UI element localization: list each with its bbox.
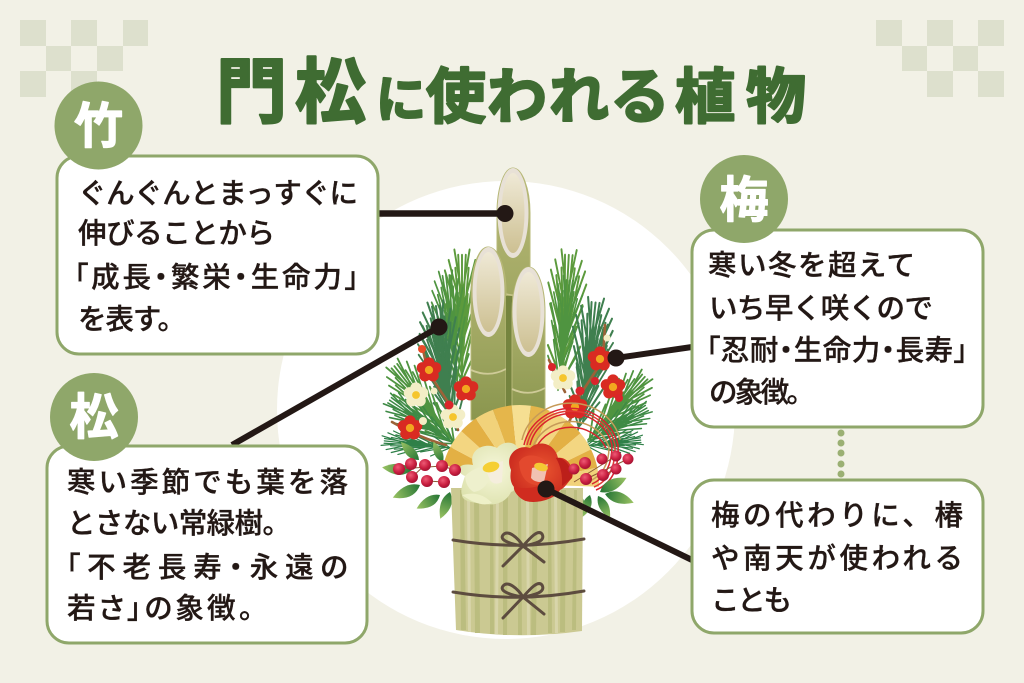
panel: camellia and nandina note	[692, 480, 983, 633]
leader line: pine	[232, 318, 448, 445]
plum blossoms	[398, 334, 625, 439]
title	[216, 54, 806, 133]
red and gold cord rings	[522, 403, 620, 490]
rope ties	[453, 533, 584, 618]
plum branches	[392, 325, 605, 445]
nandina berries	[393, 450, 634, 488]
leaves	[382, 439, 635, 521]
bamboo text: 伸びることから	[78, 218, 275, 250]
leader line: plum	[608, 347, 692, 366]
bamboo callout box	[57, 156, 378, 354]
pine branches	[378, 249, 661, 460]
pine text: 若さ」の象徴。	[67, 593, 253, 625]
bamboo text: を表す。	[78, 304, 186, 336]
plum text	[706, 250, 968, 409]
bamboo text: ぐんぐんとまっすぐに	[78, 178, 358, 210]
bamboo text	[74, 178, 359, 336]
pine text	[66, 467, 348, 625]
white camellia	[459, 443, 524, 504]
straw basket	[451, 488, 584, 635]
title: 門松	[216, 54, 366, 133]
left bamboo	[471, 247, 506, 420]
bamboo stalks	[471, 168, 545, 420]
leader line: bamboo	[378, 205, 514, 222]
pine callout box	[47, 446, 367, 643]
plum badge	[700, 155, 788, 243]
plum text: の象徴。	[709, 377, 815, 409]
centre bamboo	[497, 168, 530, 420]
panel: bamboo	[54, 82, 378, 354]
pine badge: 松	[69, 391, 119, 445]
checker pattern: top right	[876, 20, 1004, 97]
panel: plum	[692, 155, 983, 427]
bamboo badge	[54, 82, 142, 170]
title: 使われる植物	[426, 64, 806, 131]
bamboo badge: 竹	[74, 100, 123, 154]
gold fan	[443, 405, 599, 487]
right bamboo	[512, 267, 545, 420]
kadomatsu illustration	[378, 168, 661, 635]
bamboo text: 「成長・繁栄・生命力」	[74, 262, 359, 294]
checker pattern: top left	[20, 20, 148, 97]
plum badge: 梅	[719, 174, 769, 228]
plum text: 寒い冬を超えて	[708, 250, 915, 282]
plum callout box	[692, 230, 983, 427]
pine text: とさない常緑樹。	[67, 508, 291, 540]
dotted connector	[838, 430, 844, 478]
red camellia	[509, 443, 573, 502]
note callout box	[692, 480, 983, 633]
note text: ことも	[711, 585, 792, 617]
note text	[711, 500, 963, 617]
plum text: 「忍耐・生命力・長寿」	[706, 335, 968, 367]
pine text: 寒い季節でも葉を落	[67, 467, 348, 499]
white circle backdrop	[277, 181, 735, 639]
shadow between stalks	[506, 296, 512, 420]
pine text: 「不老長寿・永遠の	[66, 552, 348, 584]
panel: pine	[47, 373, 367, 643]
note text: や南天が使われる	[711, 543, 963, 575]
plum text: いち早く咲くので	[709, 293, 933, 325]
leader line: camellia	[538, 480, 692, 560]
title: に	[376, 72, 426, 128]
note text: 梅の代わりに、椿	[711, 500, 963, 532]
pine badge	[50, 373, 138, 461]
